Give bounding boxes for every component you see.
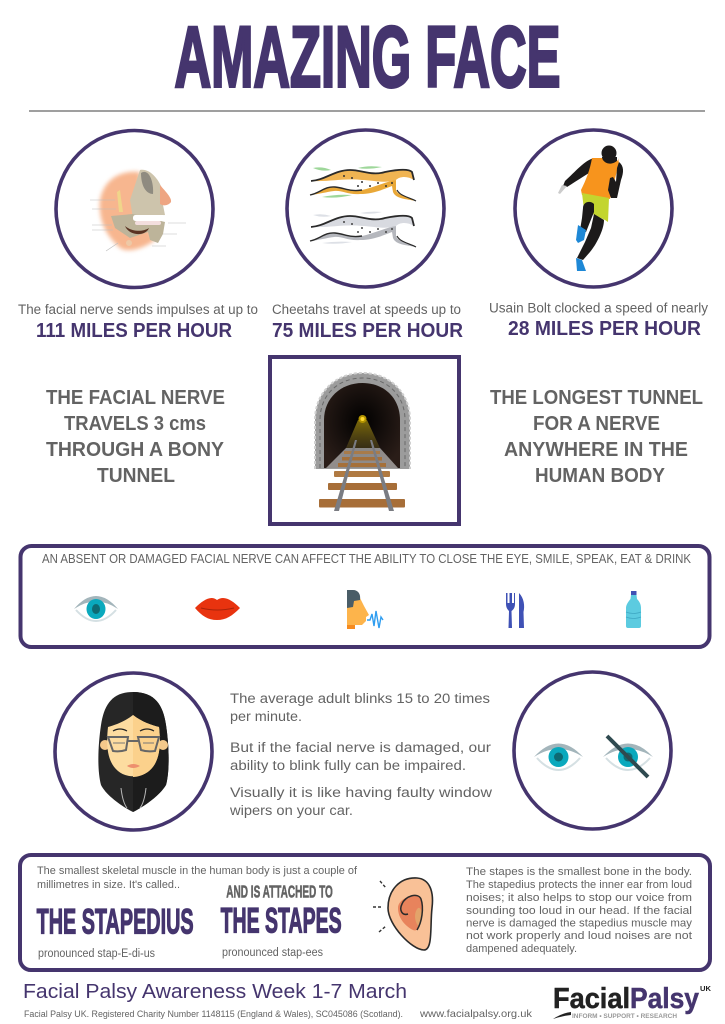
subheading: and is attached to: AND IS ATTACHED TO	[226, 882, 333, 902]
icon: railway track	[319, 440, 405, 511]
panel: Usain Bolt speed	[489, 130, 708, 340]
logo: Facial Palsy UK	[553, 983, 712, 1020]
caption: Usain Bolt: Usain Bolt clocked a speed of nearly	[489, 300, 708, 316]
text block: stapes explanation: nerve is damaged the stapedius muscle may	[466, 918, 693, 930]
logo: Facial Palsy UK: UK	[700, 984, 712, 993]
footer: charity registration: Facial Palsy UK. Registered Charity Number 1148115 (England & Wales), SC045086 (Scotland).	[24, 1009, 403, 1019]
logo: Facial Palsy UK: Facial	[553, 983, 630, 1015]
icon: runner	[558, 146, 623, 271]
panel: stapedius and stapes	[20, 855, 710, 970]
icon: eye	[74, 596, 118, 621]
icon: eye struck through	[603, 736, 653, 777]
pronunciation: stapedius: pronounced stap-E-di-us	[38, 948, 155, 960]
panel: eyes open and crossed	[514, 672, 671, 829]
heading: the stapes: THE STAPES	[221, 901, 342, 940]
text block: stapes explanation: not work properly and loud noises are not	[466, 930, 692, 942]
text block: stapes explanation: sounding too loud in our head. If the facial	[466, 905, 692, 917]
text block: blinking: per minute.	[230, 709, 302, 724]
stat: 28 miles per hour: 28 MILES PER HOUR	[508, 318, 702, 340]
icon: water bottle	[626, 591, 641, 628]
pronunciation: stapes: pronounced stap-ees	[222, 947, 323, 959]
caption: cheetahs: Cheetahs travel at speeds up to	[272, 302, 461, 317]
caption: facial nerve: The facial nerve sends impulses at up to	[18, 302, 258, 317]
text block: blinking: ability to blink fully can be impaired.	[230, 758, 466, 773]
icon: knife and fork	[506, 593, 524, 628]
text block: stapes explanation: The stapedius protects the inner ear from loud	[466, 879, 692, 891]
icon: cheetah top	[310, 166, 416, 201]
intro text: millimetres in size. It's called..	[37, 879, 180, 891]
panel: tunnel illustration	[270, 357, 459, 524]
text block: longest tunnel right: THE LONGEST TUNNEL	[490, 387, 703, 409]
text block: stapes explanation: The stapes is the smallest bone in the body.	[466, 866, 692, 878]
icon: open eye	[534, 744, 583, 770]
panel: cheetah speed	[272, 130, 464, 342]
text block: bony tunnel left	[46, 387, 225, 487]
footer: website: www.facialpalsy.org.uk	[419, 1008, 533, 1020]
icon: woman with glasses	[98, 692, 169, 812]
stat: 75 miles per hour: 75 MILES PER HOUR	[272, 320, 464, 342]
text block: blinking: wipers on your car.	[229, 803, 353, 818]
heading: the stapedius: THE STAPEDIUS	[37, 902, 194, 941]
text block: stapes explanation: dampened adequately.	[466, 943, 577, 955]
text block: bony tunnel left: THROUGH A BONY	[46, 439, 225, 461]
text block: blinking: Visually it is like having faulty window	[230, 785, 492, 800]
footer: awareness week: Facial Palsy Awareness Week 1-7 March	[23, 981, 407, 1003]
text block: stapes explanation	[466, 866, 693, 955]
icon: cheetah bottom	[310, 212, 416, 247]
logo: Facial Palsy UK: Palsy	[630, 983, 699, 1015]
stat: 111 miles per hour: 111 MILES PER HOUR	[36, 320, 233, 342]
panel: facial nerve speed	[18, 130, 258, 342]
logo: Facial Palsy UK: INFORM • SUPPORT • RESEARCH	[572, 1013, 677, 1020]
icon: ear	[373, 878, 432, 950]
intro text	[37, 865, 358, 891]
panel: abilities affected	[20, 546, 710, 647]
text block: longest tunnel right: FOR A NERVE	[533, 413, 660, 435]
text block: stapes explanation: noises; it also helps to stop our voice from	[466, 892, 692, 904]
text block: blinking: The average adult blinks 15 to 20 times	[230, 691, 490, 706]
intro text: The smallest skeletal muscle in the human body is just a couple of	[37, 865, 358, 877]
text block: blinking: But if the facial nerve is damaged, our	[230, 740, 492, 755]
text block: longest tunnel right	[490, 387, 703, 487]
icon: tunnel arch	[315, 373, 410, 469]
icon: facial anatomy	[90, 170, 186, 251]
panel: woman blinking	[55, 673, 212, 830]
text block: longest tunnel right: HUMAN BODY	[535, 465, 666, 487]
text block: bony tunnel left: THE FACIAL NERVE	[46, 387, 225, 409]
icon: lips	[195, 598, 240, 620]
text block: longest tunnel right: ANYWHERE IN THE	[504, 439, 688, 461]
icon: speaking face	[347, 590, 383, 629]
text block: bony tunnel left: TRAVELS 3 cms	[64, 413, 206, 435]
text block: bony tunnel left: TUNNEL	[97, 465, 175, 487]
text block: blinking	[229, 691, 492, 818]
